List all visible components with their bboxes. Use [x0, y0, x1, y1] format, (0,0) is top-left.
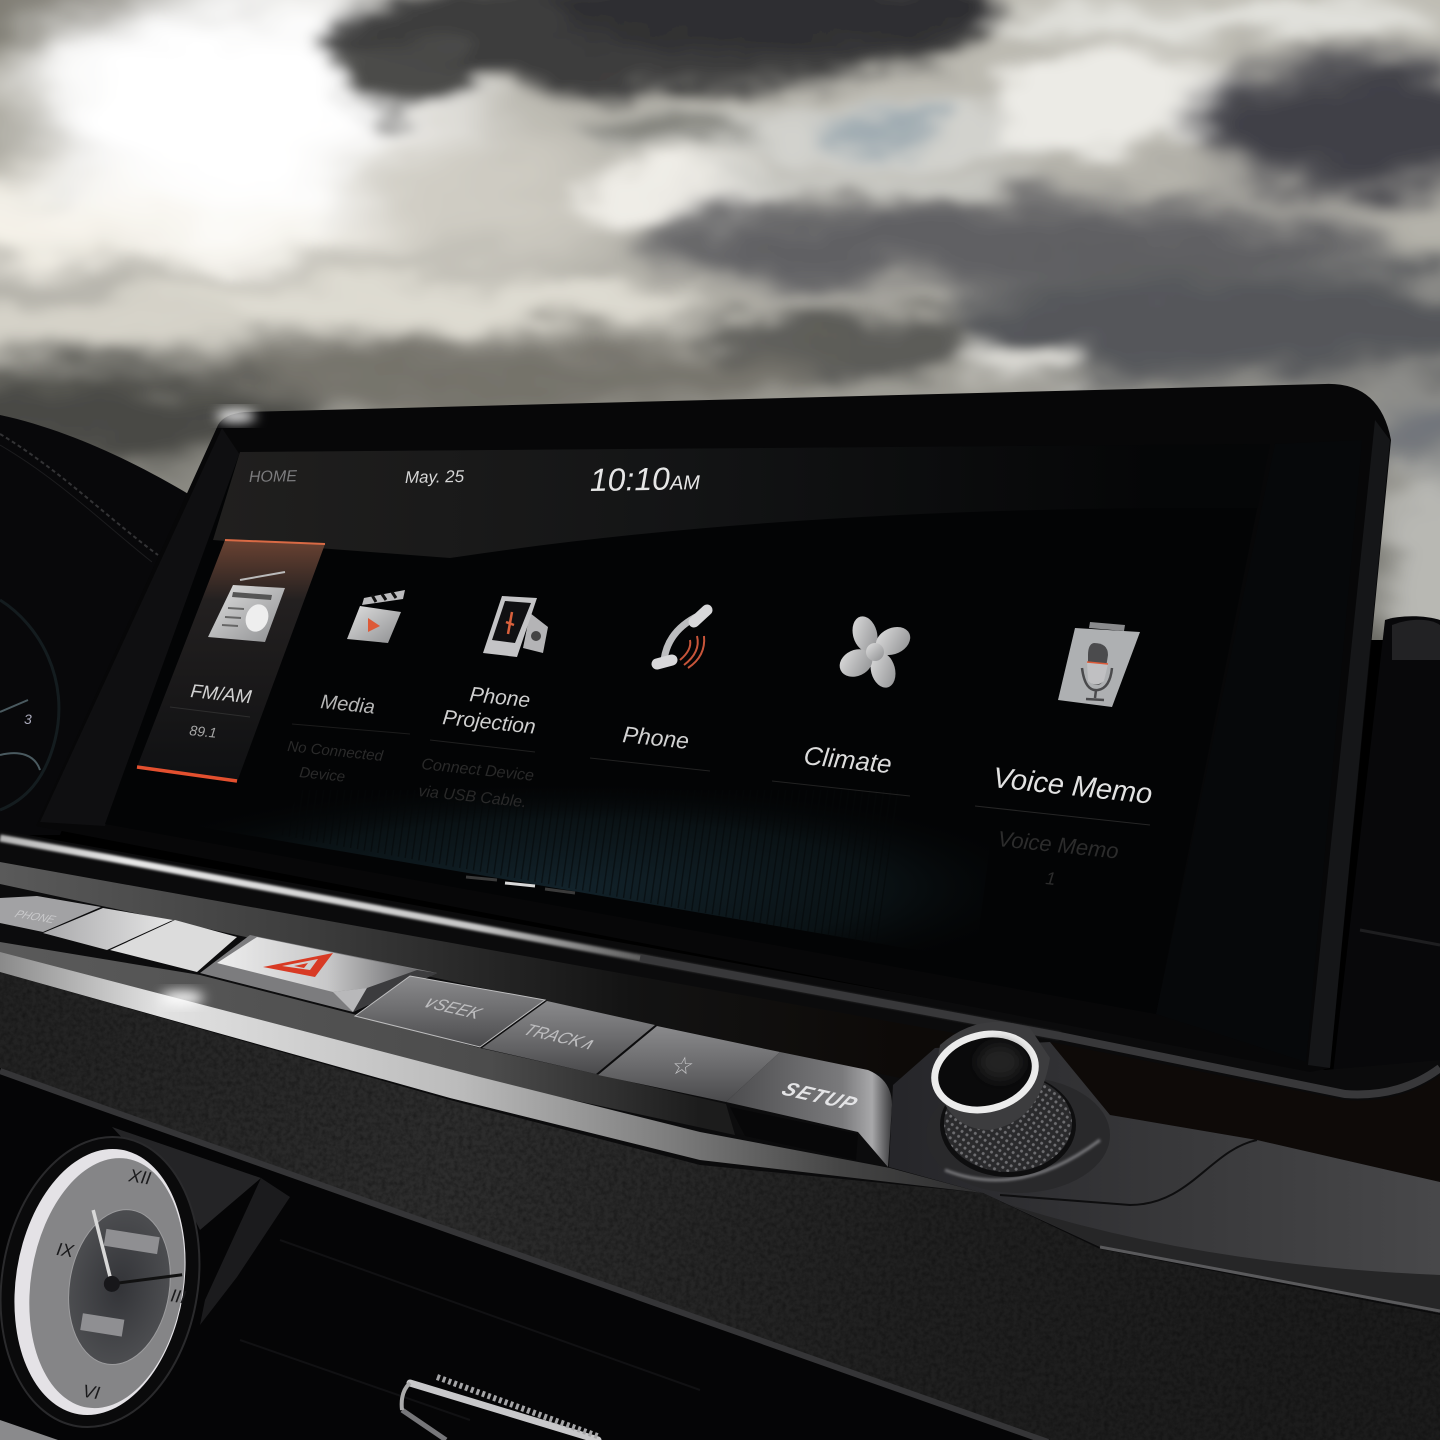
menu tile: Voice Memo [975, 622, 1154, 889]
clock numerals: XII [127, 1165, 152, 1189]
label: Voice Memo: Voice Memo [991, 762, 1154, 811]
button: seek [355, 976, 545, 1047]
label: count: 1 [1045, 868, 1057, 889]
right side interior [1330, 616, 1440, 1100]
label: connect device: Connect Device [421, 756, 535, 785]
label: Phone: Phone [621, 721, 690, 754]
button: seek: ∨SEEK [418, 992, 487, 1023]
menu tile: Media [287, 590, 410, 786]
bezel left edge [40, 428, 240, 826]
screen glass [105, 440, 1362, 1062]
clock numerals: IX [55, 1239, 76, 1262]
button: track [482, 1001, 655, 1074]
leather lower dash panel [0, 972, 1440, 1440]
button: favourite star [598, 1026, 780, 1102]
bezel right edge [1308, 420, 1390, 1068]
icon: radio [208, 572, 285, 642]
label: no connected device: No Connected [287, 738, 384, 765]
clock numerals [34, 1156, 205, 1414]
label: frequency: 89.1 [189, 722, 217, 741]
clock numerals: VI [81, 1381, 101, 1403]
button: phone [0, 896, 101, 932]
lower strip under buttons [0, 942, 735, 1135]
button: phone: PHONE [13, 909, 57, 926]
button: setup [726, 1052, 892, 1167]
button: track: TRACK∧ [520, 1020, 600, 1053]
icon: hazard triangle [263, 953, 333, 977]
walnut trim, right of knob [1050, 1042, 1440, 1182]
sun flare on bezel corner [216, 410, 256, 422]
icon: fan [835, 614, 915, 690]
glossy black lower section [0, 1068, 1050, 1440]
button: setup: SETUP [777, 1079, 863, 1115]
analog clock [0, 1122, 220, 1440]
label: Phone: Phone [468, 683, 531, 712]
icon: voice memo [1058, 622, 1140, 707]
label: Media: Media [319, 691, 376, 719]
dark cavity below setup [730, 1107, 858, 1160]
menu tile: FM/AM [137, 540, 325, 782]
button: hazard [200, 935, 437, 1012]
menu tile: Climate [772, 614, 915, 796]
instrument hood, left [0, 415, 190, 835]
label: Projection: Projection [441, 706, 537, 739]
button: blank [43, 908, 173, 950]
icon: handset [657, 610, 707, 668]
button: favourite star: ☆ [670, 1053, 693, 1080]
rotary knob [926, 1022, 1110, 1193]
label: via USB cable: via USB Cable. [418, 783, 527, 811]
menu tile: Phone [590, 610, 710, 771]
label: date: May. 25 [405, 467, 465, 487]
lower dash base and upper trim [0, 830, 1440, 1440]
label: FM/AM: FM/AM [189, 681, 253, 708]
clock numerals: III [169, 1285, 187, 1307]
label: time: 10:10AM [589, 460, 701, 498]
knob console surface [889, 1042, 1440, 1313]
menu tile: Phone Projection [418, 596, 548, 811]
sky with clouds and sun [0, 0, 1440, 680]
icon: clapperboard [347, 590, 405, 643]
label: device: Device [299, 764, 346, 786]
label: Climate: Climate [802, 740, 893, 779]
label: home: HOME [249, 468, 297, 486]
display bezel [36, 384, 1391, 1072]
air vent [240, 1240, 700, 1440]
label: voice memo sub: Voice Memo [996, 826, 1120, 864]
lower chrome trim [0, 952, 983, 1193]
status bar [249, 460, 701, 498]
control buttons row [0, 884, 900, 1170]
icon: phone projection [483, 596, 548, 657]
page indicator [466, 877, 575, 893]
button: blank 2 [110, 920, 237, 972]
instrument hood, left: 3 [24, 711, 32, 727]
